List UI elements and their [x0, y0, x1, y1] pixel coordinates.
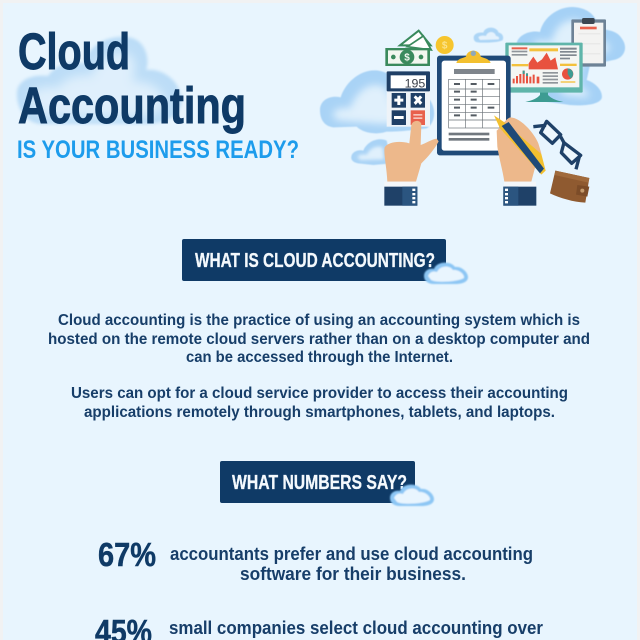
cloud: small lower left — [351, 139, 392, 165]
title — [18, 23, 246, 134]
icon: right hand holding pen — [494, 115, 546, 206]
icon: glasses — [533, 121, 581, 169]
icon: calculator — [387, 71, 430, 127]
title: Accounting — [18, 77, 246, 134]
icon: gold coin — [436, 36, 454, 54]
statistic: 67%: software for their business. — [240, 564, 466, 584]
icon: small cloud — [390, 485, 434, 506]
statistic: 67% — [98, 536, 533, 584]
icon: banknotes — [385, 31, 431, 66]
section heading: what is cloud accounting: WHAT IS CLOUD ACCOUNTING? — [195, 250, 435, 272]
illustration: accounting desk — [320, 7, 625, 206]
subtitle: IS YOUR BUSINESS READY? — [17, 136, 299, 164]
statistic: 45%: small companies select cloud accounting over — [169, 618, 543, 638]
statistic: 67%: accountants prefer and use cloud accounting — [170, 544, 533, 564]
icon: gold coin: $ — [442, 41, 448, 52]
intro paragraph: can be accessed through the Internet. — [186, 349, 453, 366]
icon: wallet — [550, 171, 589, 203]
cloud: small top — [474, 28, 503, 43]
icon: small cloud — [424, 263, 468, 284]
intro paragraph: applications remotely through smartphones, tablets, and laptops. — [84, 404, 555, 421]
icon: dashboard monitor — [505, 43, 583, 102]
intro paragraph: Users can opt for a cloud service provider to access their accounting — [71, 385, 568, 402]
intro paragraph: hosted on the remote cloud servers rather than on a desktop computer and — [48, 331, 590, 348]
title: Cloud — [18, 23, 130, 80]
icon: calculator: 195 — [405, 76, 426, 90]
icon: report clipboard — [571, 18, 606, 67]
cloud: left large — [320, 70, 434, 133]
section heading: what numbers say: WHAT NUMBERS SAY? — [232, 472, 407, 494]
section heading: what numbers say — [220, 461, 434, 506]
statistic: 67%: 67% — [98, 536, 156, 573]
statistic: 45% — [95, 613, 543, 640]
title cloud — [17, 37, 182, 124]
intro paragraph: Cloud accounting is the practice of using an accounting system which is — [58, 312, 580, 329]
icon: left hand pressing key — [384, 121, 439, 206]
icon: clipboard with table — [437, 51, 511, 155]
intro paragraph — [48, 312, 590, 421]
icon: banknotes: $ — [404, 53, 410, 64]
cloud: upper right — [517, 7, 625, 105]
section heading: what is cloud accounting — [182, 239, 468, 284]
